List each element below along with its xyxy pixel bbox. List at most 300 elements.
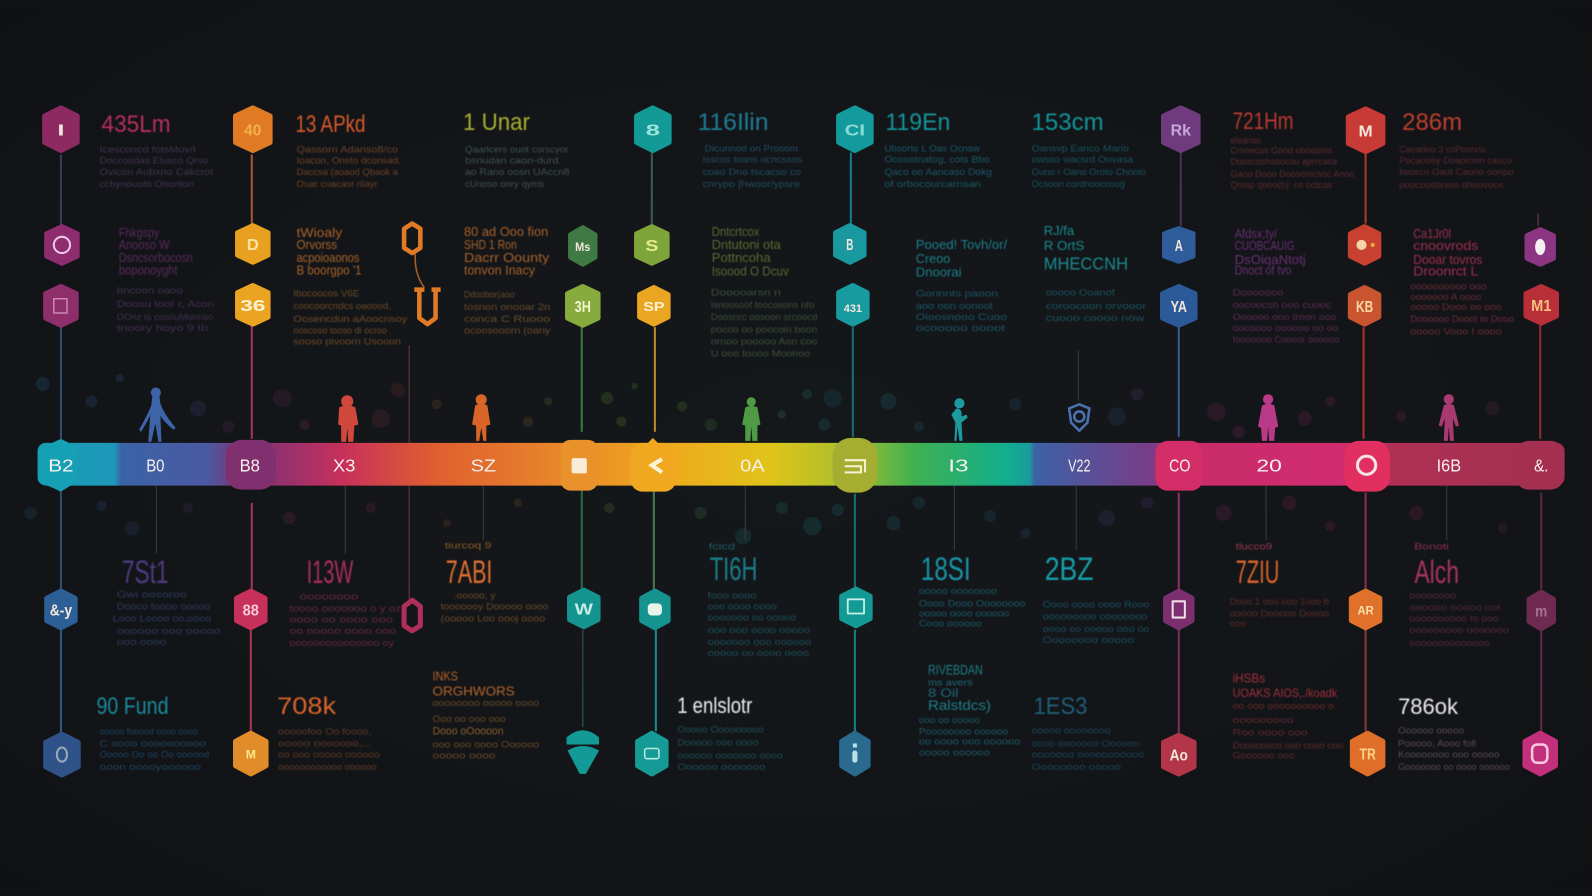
node 4C: W [575, 602, 594, 619]
node 3C: 3H [575, 299, 591, 316]
node 4H [1529, 592, 1553, 629]
text block 1B: Ioacon, Onsto dconsad, [296, 156, 401, 167]
bar label 2O: 20 [1256, 455, 1282, 475]
text block 5B: oo ooo ooooo oooooo [278, 750, 380, 761]
text block 3B [293, 289, 407, 347]
figure: teal person [951, 398, 968, 441]
node 4B [237, 591, 265, 628]
text block 5H: Koooooooo ooo ooooo [1398, 750, 1500, 761]
text block 5G: UOAKS AIOS,./koadk [1233, 686, 1338, 700]
text block 5D: oooooo ooooooo oooo [677, 751, 783, 762]
teal cone marker [567, 730, 599, 774]
text block 2C: 80 ad Ooo fion [464, 225, 548, 239]
text block 1F: Ouno r Oano Oroto Chnoto [1032, 167, 1146, 178]
text block 5C: ORGHWORS [433, 684, 515, 699]
node 5A [46, 734, 78, 775]
text block 1C [463, 109, 570, 190]
text block 5B: ooooofoo Oo foooo, [278, 726, 372, 737]
text block 4H: oooooooo [1409, 590, 1456, 601]
node 3G: KB [1356, 299, 1373, 316]
text block 3A: tnoory hoyo 9 tb [117, 323, 208, 334]
crimson O marker [404, 600, 420, 631]
text block 3F: ooooo Ooanof [1046, 288, 1115, 299]
text block 2B: B boorgpo '1 [296, 263, 361, 277]
node 2E: B [846, 237, 853, 254]
text block 4F: ooooooooo oooooooo [1043, 612, 1147, 623]
node 1C: 8 [646, 122, 660, 139]
text block 4C: tooooooy Dooooo oooo [441, 601, 548, 612]
text block 1A: ccbynouoto Ononton [100, 179, 194, 190]
text block 2A: boponoyght [119, 263, 178, 277]
text block 2F: MHECCNH [1044, 253, 1128, 273]
text block 4A: Dooco toooo ooooo [117, 601, 210, 612]
text block 1C: bsnudan caon-durd. [465, 156, 561, 167]
text block 3D: pocoo oo poocoin boon [711, 324, 817, 335]
text block 2D [712, 225, 789, 278]
text block 2C [464, 225, 550, 277]
text block 4B: oo ooooo oooo ooo [289, 626, 396, 637]
text block 4C: tiurcoq 9 [445, 541, 491, 552]
text block 5G: Doooooooo ooo oooo ooo [1233, 741, 1343, 752]
text block 5E: oo oooo ooo oooooo [919, 736, 1020, 747]
text block 5B: ooooo ooooooo,... [278, 739, 372, 750]
text block 5A: Ooooo Oo oo Oo oooood [100, 750, 209, 761]
text block 5B [277, 693, 380, 773]
node 2C [571, 228, 595, 264]
text block 2H: Dooar tovros [1413, 253, 1482, 267]
node 3D: SP [643, 299, 665, 314]
node 5B: M [246, 748, 256, 762]
text block 2E: Dnoorai [916, 265, 961, 279]
text block 3D: ornoo pooooo Aon coo [711, 336, 817, 347]
node 3E [839, 286, 867, 324]
bar node 6: CO [1169, 455, 1190, 475]
text block 5B: oooooooooooo oooooo [278, 762, 377, 773]
text block 5H [1398, 694, 1510, 773]
text block 4H: ooooooooo ooooooo [1409, 625, 1509, 636]
text block 1H [1399, 109, 1514, 191]
text block 4A: oooooo ooo ooooo [117, 626, 220, 637]
text block 3C [464, 290, 550, 336]
node 4D [642, 591, 668, 628]
text block 5H: 786ok [1398, 694, 1459, 719]
node 5G [1525, 733, 1555, 774]
figure: magenta person [1258, 394, 1278, 441]
text block 3H: Doooooo Dooot to Dooo [1410, 314, 1514, 325]
node 3B: 36 [240, 298, 266, 315]
text block 3F [1046, 288, 1147, 324]
text block 3A: bncoon oaoo [117, 286, 183, 297]
figure: blue person [139, 388, 176, 442]
text block 4G: Dooo 1 ooo ooo 1ooo b [1230, 596, 1329, 607]
text block 5H: Gooooooo oo oooo oooooo [1398, 762, 1510, 773]
timeline bar [38, 438, 1565, 493]
text block 3G: oocoocsh ooo cuooc [1233, 300, 1331, 311]
text block 1D: coao Dno tscacso co [703, 167, 801, 178]
text block 1D: Isscos toans ocncssos [703, 155, 802, 166]
node 2F [1165, 229, 1193, 261]
figure: green person [742, 397, 760, 441]
text block 2B: acpoioaonos [296, 251, 359, 265]
node 3A [46, 287, 76, 325]
text block 1B [295, 111, 401, 190]
text block 2G: DsOiqaNtotj [1235, 253, 1306, 267]
node 4G [1351, 591, 1380, 628]
text block 3F: cuooo coooo now [1046, 313, 1144, 324]
text block 3B: Oosencdun aAoocnsoy [293, 314, 407, 325]
text block 1H: 286m [1402, 109, 1462, 136]
text block 1G: 721Hm [1233, 108, 1293, 135]
text block 3D [711, 288, 817, 360]
text block 1A [100, 111, 214, 190]
text block 4A: ooo oooo [117, 637, 167, 648]
text block 5A: C oooo oooooooooo [100, 739, 206, 750]
node 3F [1163, 287, 1195, 325]
text block 4D: TI6H [710, 551, 757, 587]
text block 4D: ooooooo oo ooooo [708, 613, 796, 624]
text block 5C: oooooooo ooooo oooo [433, 698, 539, 709]
text block 5C: ooooo oooo [433, 751, 495, 762]
text block 5E: ooo oo ooooo [919, 715, 980, 726]
node 4E [842, 589, 870, 626]
bar node 1 [39, 439, 77, 492]
node 4H: m [1535, 604, 1547, 621]
text block 4B: I13W [307, 554, 354, 590]
text block 4F: oooo oo ooooo ooo oo [1043, 624, 1149, 635]
text block 3C: ocoosooorn (oany [464, 325, 550, 336]
node 2B [238, 226, 268, 262]
text block 4A: Looo Loooo oo.oooo [113, 614, 211, 625]
text block 4D: fcicd [709, 542, 735, 553]
node 4A: &-y [50, 603, 73, 620]
node 2D [637, 227, 667, 263]
text block 1G: Qmsp qooo(b): co octcos [1231, 180, 1332, 191]
text block 4C: (ooooo Loo oooj oooo [441, 614, 545, 625]
bar label B0: B0 [146, 455, 164, 475]
text block 4G [1230, 542, 1329, 630]
node 1D [839, 108, 871, 151]
text block 2F: RJ/fa [1044, 224, 1075, 238]
text block 5E: Poooooooo oooooo [919, 726, 1008, 737]
text block 5G: iHSBs [1233, 671, 1265, 686]
text block 4G: tlucco9 [1236, 542, 1272, 553]
text block 4B: oooo oo oooo ooo [289, 615, 393, 626]
text block 3H: oooooooooo ooo [1410, 282, 1486, 293]
text block 5A [96, 693, 209, 773]
text block 2F [1044, 224, 1128, 273]
text block 5G: Goooooo ooo [1233, 751, 1295, 762]
text block 1G: eloanoo [1231, 135, 1261, 146]
node 3G [1350, 288, 1379, 324]
text block 4H: oooooo ooooo oot [1409, 602, 1501, 613]
text block 3E: Gonnnts paoon [916, 289, 998, 300]
bar node 2: B8 [240, 455, 260, 475]
node 5D [842, 733, 868, 774]
node 4C [570, 590, 598, 627]
text block 2C: tonvon Inacy [464, 263, 536, 277]
text block 2E [916, 238, 1008, 279]
text block 5G: ooooooooo [1233, 715, 1293, 726]
text block 3D: Doosnrc oosoon srcoocd [711, 312, 817, 323]
text block 3A: Doosu toor r, Acon [117, 299, 214, 310]
text block 1A: 435Lm [102, 111, 171, 138]
text block 2G [1235, 227, 1306, 277]
node 1E: Rk [1171, 122, 1191, 139]
text block 4C: .ooooo, y [454, 590, 496, 601]
connector lines between nodes [61, 153, 1541, 733]
text block 3G: Iooooooo Coooor oooooo [1233, 334, 1339, 345]
text block 4F: Oooooooo ooooo [1043, 635, 1134, 646]
text block 2E: Creoo [916, 252, 950, 266]
text block 5E: 8 Oil [928, 686, 958, 700]
text block 4D: fooo oooo [708, 590, 756, 601]
text block 5F: ooooo oooooooo [1032, 725, 1111, 736]
text block 1D [698, 109, 802, 190]
node 1B [236, 108, 270, 151]
text block 4B: oooooooo [300, 591, 358, 602]
node 3C [568, 287, 598, 325]
node 2G [1350, 227, 1379, 263]
text block 1E [884, 109, 992, 190]
text block 3F: coroocoon orvooor [1046, 301, 1147, 312]
text block 3G: oocoooo oooooo oo oo [1233, 323, 1338, 334]
bar node 5 [833, 438, 877, 493]
node 4B: 88 [243, 603, 259, 620]
bar label I3: I3 [948, 455, 969, 475]
text block 2H: Ca1Jr0l [1413, 227, 1451, 241]
node 3H [1526, 287, 1556, 323]
text block 1E: Ubsorto L Oas Ocnsw [884, 144, 980, 155]
node 1B: 40 [244, 122, 261, 139]
text block 4C: 7ABI [446, 554, 492, 590]
text block 1G: Dooscoshsoocou aprrcasa [1231, 157, 1338, 168]
text block 3G [1233, 288, 1339, 345]
node 1A [45, 108, 77, 151]
bar node 2 [225, 440, 276, 490]
text block 4G: 7ZIU [1236, 554, 1279, 590]
text block 2D: Isoood O Dcuv [712, 264, 789, 278]
text block 4B [289, 554, 401, 649]
node 1C [637, 108, 669, 151]
text block 1C: ao Rano oosn UAccn8 [465, 167, 570, 178]
node 3B [238, 286, 268, 324]
node 5E: Ao [1170, 748, 1188, 765]
orange O and U connector [404, 224, 441, 324]
text block 4H: Alch [1414, 554, 1459, 590]
text block 3D: U ooo toooo Moonoo [711, 349, 810, 360]
text block 1C: 1 Unar [463, 109, 530, 136]
text block 2A: Dsncsorbocosn [119, 251, 193, 265]
text block 1B: Daccsa (aoaod Qbaok a [296, 167, 399, 178]
node 4F [1166, 591, 1192, 628]
row 1 node icons [45, 108, 1556, 775]
text block 2E: Pooed! Tovh/or/ [916, 238, 1008, 252]
text block 4G: ooooo Dooooo Doooo [1230, 609, 1329, 620]
text block 4B: ooooooooooooooo oy [289, 638, 394, 649]
text block 2B: tWioaly [296, 226, 343, 240]
node 5B [236, 733, 266, 774]
text block 5H: Oooooo ooooo [1398, 725, 1464, 736]
text block 5F: oooo ooooooo Oooooo [1032, 739, 1139, 750]
text block 4E: ooooo oooo oooooo [919, 609, 1009, 620]
text block 4H: oooooooooo to ooo [1409, 614, 1499, 625]
text block 5C: Ooo oo ooo ooo [433, 714, 506, 725]
text block 4G: ooo [1230, 619, 1246, 630]
text block 5D: Dooooo ooo oooo [677, 737, 758, 748]
text block 5D [677, 693, 783, 773]
text block 5D: 1 enlslotr [677, 693, 753, 718]
text block 1H: Iwoscn Oaot Caono oonpo [1399, 167, 1514, 178]
text block 2H: Droonrct L [1413, 264, 1478, 278]
text block 5G [1233, 671, 1343, 762]
text block 5H: Pooooo, Aooo fofl [1398, 739, 1476, 750]
text block 1C: Qaarlcers ouot corscyor [465, 145, 569, 156]
text block 2H: cnoovrods [1413, 239, 1478, 253]
text block 2G: CUOBCAUIG [1235, 239, 1295, 253]
text block 1G: Cmoecus Gond oboasms [1231, 146, 1332, 157]
text block 3E: Oioosnooo Cuoo [916, 312, 1007, 323]
text block 1D: Dicunnod on Prosom [705, 144, 798, 155]
node 1F: M [1358, 123, 1373, 140]
text block 2G: Dnoct of tvo [1235, 263, 1291, 277]
node 3F: YA [1171, 299, 1187, 316]
node 2A [47, 227, 77, 263]
node 2F: A [1175, 238, 1183, 255]
text block 4A: 7St1 [122, 554, 169, 590]
text block 5E: Ralstdcs) [928, 698, 991, 714]
text block 1F: Ocsoon cordnooccoug [1032, 179, 1125, 190]
text block 5D: Oooooo ooooooo [677, 762, 766, 773]
text block 5C: ooo ooo oooo Oooooo [433, 740, 539, 751]
text block 4E: Oooo Dooo Oooooooo [919, 598, 1025, 609]
text block 1A: Icesconcd fotsMov/I [100, 145, 196, 156]
node 3H: M1 [1531, 298, 1552, 315]
icon: shield badge [1069, 404, 1089, 431]
bar node 6 [1155, 441, 1203, 491]
text block 1B: 13 APkd [295, 111, 366, 138]
text block 2D: Dntutoni ota [712, 238, 782, 252]
node 3E: 431 [844, 303, 862, 315]
text block 1H: Caoadoo 3 cnPoshns [1399, 145, 1486, 156]
text block 3D: Dooooarsn n [711, 288, 781, 299]
text block 5F [1032, 693, 1144, 773]
figure: red person [338, 395, 358, 442]
text block 2B [296, 226, 361, 277]
text block 4H: Bonoti [1414, 542, 1449, 553]
node 2B: D [247, 237, 259, 254]
text block 3A [117, 286, 214, 334]
text block 2C: SHD 1 Ron [464, 238, 517, 252]
text block 1E: Ocoostnatog, cots Bbo [884, 155, 990, 166]
text block 3A: OOnz ts cosnuMonnso [117, 312, 213, 323]
text block 4F: 2BZ [1045, 551, 1093, 587]
text block 4D: ooooo oo oooo oooo [708, 648, 809, 659]
bar label V22: V22 [1068, 455, 1090, 475]
text block 4E: ooooo oooooooo [919, 586, 997, 597]
text block 1C: cUnoso onry qyms [465, 179, 544, 190]
text block 5C: INKS [433, 669, 458, 684]
text block 1D: 116Ilin [698, 109, 769, 136]
text block 2B: Orvorss [296, 238, 337, 252]
text block 3H: ooooo Vooo I oooo [1410, 326, 1502, 337]
text block 1F: Oansvp Eanco Mario [1032, 144, 1129, 155]
text block 5G: Roo oooo ooo [1233, 727, 1308, 738]
bar label I6B: I6B [1437, 455, 1461, 475]
text block 3H [1410, 282, 1514, 337]
node 5C [638, 733, 666, 774]
bar node 8: &. [1534, 455, 1548, 475]
text block 3G: Dooooooo [1233, 288, 1283, 299]
text block 4E [919, 551, 1025, 630]
text block 5B: 708k [277, 693, 337, 720]
text block 5A: ooooo fooood oooo oooo [100, 726, 198, 737]
text block 1B: Qassorn Adanso8/co [296, 145, 398, 156]
node 3D [640, 288, 668, 324]
bar node 1: B2 [48, 455, 74, 475]
node 4G: AR [1357, 604, 1374, 618]
text block 1G: Gaoo Dooo Docoomcsoc Anno [1231, 169, 1354, 180]
text block 5G: oo ooo oooooooooo o [1233, 701, 1334, 712]
text block 1B: Ouar cuacasr rilayr [296, 179, 378, 190]
text block 3C: tosnon onooar 2n [464, 302, 550, 313]
text block 3B: coocoorcndcs oaoood, [293, 301, 391, 312]
text block 4B: toooo ooooooo o y oz [289, 603, 401, 614]
text block 5E [919, 662, 1020, 759]
text block 2A: Anooso W [119, 238, 170, 252]
node 5F: TR [1359, 747, 1376, 764]
text block 4E: Cooo oooooo [919, 619, 982, 630]
text block 5D: Ooooo Ooooooooo [677, 724, 764, 735]
bar node 7 [1344, 441, 1390, 492]
text block 2G: Afdsx,ty/ [1235, 227, 1278, 241]
node 1E [1164, 108, 1198, 151]
text block 1E: 119En [885, 109, 950, 136]
bar node 4 [631, 438, 676, 492]
text block 5F: Oooooooo ooooo [1032, 762, 1121, 773]
figure: orange person [472, 394, 490, 441]
text block 3C: conca C Ruooo [464, 314, 550, 325]
text block 4C [441, 541, 548, 625]
text block 4D [708, 542, 811, 659]
text block 3B: Ibocoocos V6E [293, 289, 359, 300]
figure: rose person [1439, 394, 1459, 441]
text block 5A: ooon ooooyoooooo [100, 762, 201, 773]
text block 1G [1231, 108, 1354, 191]
text block 3E: ocooooo oooot [916, 323, 1006, 334]
text block 2D: Pottncoha [712, 251, 772, 265]
text block 5A: 90 Fund [96, 693, 169, 720]
text block 2A [119, 226, 193, 277]
text block 4E: 18SI [921, 551, 971, 587]
text block 2F: R OrtS [1044, 239, 1084, 253]
text block 3D: Isnoosoof toocosons nfo [711, 300, 814, 311]
text block 1D: cnrypo [hwoor/ypsre [703, 179, 800, 190]
paint splatter behind timeline [24, 374, 1508, 544]
text block 4F: Oooo oooo oooo Rooo [1043, 599, 1149, 610]
text block 4A [113, 554, 220, 648]
text block 1F [1032, 109, 1146, 190]
text block 1F: 153cm [1032, 109, 1104, 136]
text block 2H [1413, 227, 1482, 278]
text block 1A: Ovicon Aubxno Cakcrot [100, 167, 214, 178]
text block 1H: Pocaoosy Doaoroon casco [1399, 156, 1512, 167]
text block 3E [916, 289, 1007, 334]
text block 4A: Gwi oosoroo [117, 589, 187, 600]
text block 2A: Fhkgspy [119, 226, 160, 240]
text block 3C: Ddoobor(aoo [464, 290, 515, 301]
text block 1E: of orbocourcarnsan [884, 179, 981, 190]
text block 3G: Oooooo ooo Iroon ooo [1233, 312, 1336, 323]
